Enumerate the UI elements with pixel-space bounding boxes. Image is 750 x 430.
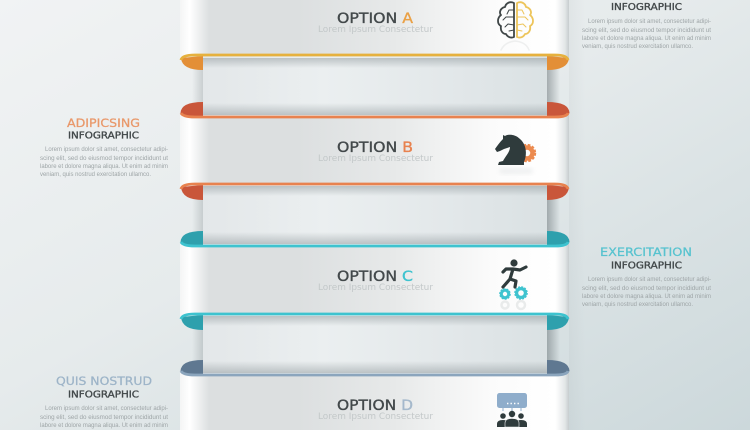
band label C: Lorem Ipsum Consectetur [318, 283, 434, 293]
body copy: veniam, quis nostrud exercitation ullamco. [40, 171, 151, 178]
text block: quis nostrud [40, 374, 168, 429]
band label D: OPTION D [337, 398, 413, 414]
body copy: scing elit, sed do eiusmod tempor incididunt ut [40, 414, 168, 421]
icon: brain [498, 2, 533, 50]
heading: exercitation: EXERCITATION [600, 245, 692, 259]
band label A: Lorem Ipsum Consectetur [318, 25, 434, 35]
ribbon band C [180, 231, 570, 330]
band label B: Lorem Ipsum Consectetur [318, 154, 434, 164]
body copy: Lorem ipsum dolor sit amet, consectetur adipi- [588, 276, 711, 283]
subheading: infographic: INFOGRAPHIC [611, 260, 682, 272]
body copy: veniam, quis nostrud exercitation ullamco. [582, 43, 693, 50]
body copy [582, 18, 711, 50]
body copy: labore et dolore magna aliqua. Ut enim ad minim [582, 35, 711, 42]
heading: infographic: INFOGRAPHIC [611, 2, 682, 13]
body copy: scing elit, sed do eiusmod tempor incididunt ut [582, 27, 711, 34]
text block: adipicsing [40, 116, 168, 178]
icon: runner on gears [500, 259, 527, 309]
heading: adipicsing: ADIPICSING [67, 116, 140, 130]
band label A [318, 11, 434, 35]
body copy: Lorem ipsum dolor sit amet, consectetur adipi- [588, 18, 711, 25]
folded ribbon ends B [180, 102, 570, 200]
band label D: Lorem Ipsum Consectetur [318, 412, 434, 422]
central column behind bands [192, 0, 585, 430]
body copy [582, 276, 711, 308]
ribbon band A [180, 0, 569, 70]
icon: chess knight with gear [495, 135, 535, 174]
band label C [318, 269, 434, 293]
body copy: veniam, quis nostrud exercitation ullamco. [582, 301, 693, 308]
folded ribbon ends A [181, 56, 569, 70]
body copy: labore et dolore magna aliqua. Ut enim ad minim [40, 163, 168, 170]
ribbon band D [180, 360, 570, 430]
text block: exercitation [582, 245, 711, 308]
heading: quis nostrud: QUIS NOSTRUD [56, 374, 152, 388]
band label A: OPTION A [337, 11, 413, 27]
body copy [40, 405, 168, 429]
icon: team with speech bubble [497, 393, 527, 427]
folded ribbon ends C [180, 231, 570, 330]
folded ribbon ends D [180, 360, 570, 375]
body copy: labore et dolore magna aliqua. Ut enim ad minim [582, 293, 711, 300]
body copy: Lorem ipsum dolor sit amet, consectetur adipi- [45, 405, 168, 412]
subheading: infographic: INFOGRAPHIC [68, 130, 139, 142]
ribbon band B [180, 102, 570, 200]
body copy: Lorem ipsum dolor sit amet, consectetur adipi- [45, 146, 168, 153]
band label B [318, 140, 434, 164]
band label C: OPTION C [337, 269, 413, 285]
body copy: scing elit, sed do eiusmod tempor incididunt ut [40, 155, 168, 162]
subheading: infographic: INFOGRAPHIC [68, 390, 139, 400]
band label B: OPTION B [337, 140, 413, 156]
body copy [40, 146, 168, 178]
body copy: labore et dolore magna aliqua. Ut enim ad minim [40, 422, 168, 429]
text block: top right [582, 2, 711, 50]
band label D [318, 398, 434, 422]
body copy: scing elit, sed do eiusmod tempor incididunt ut [582, 285, 711, 292]
